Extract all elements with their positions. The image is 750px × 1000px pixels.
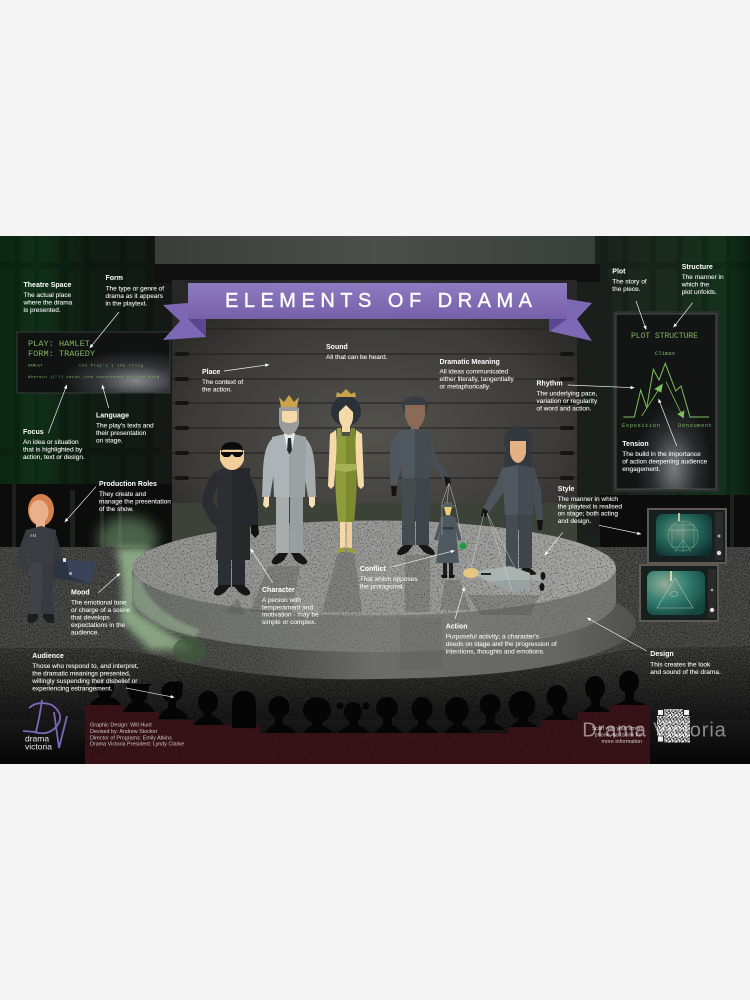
label: Production Roles [99, 481, 171, 513]
label: Character: motivation - may be [262, 612, 319, 619]
left screen: Hamlet: PLAY: HAMLET [28, 339, 90, 349]
green shadow under stage [173, 637, 207, 663]
label: Dramatic Meaning: or metaphorically. [440, 384, 491, 391]
label: Focus: An idea or situation [23, 439, 79, 446]
lower stage step [210, 602, 636, 680]
label: Action: intentions, thoughts and emotions. [446, 648, 545, 655]
right screen: plot structure [613, 311, 719, 492]
title: ELEMENTS OF DRAMA [225, 290, 533, 312]
label: Conflict: That which opposes [360, 576, 418, 583]
label: Character: temperament and [262, 604, 313, 611]
label: Focus [23, 429, 85, 461]
falling action arrow [666, 382, 684, 418]
character: queen [328, 389, 364, 553]
arrow: focus [48, 385, 67, 433]
back wall left [0, 236, 172, 484]
stage manager figure: SM [30, 533, 37, 538]
label: Design: and sound of the drama. [650, 669, 721, 676]
label: Rhythm: of word and action. [536, 406, 592, 412]
watermark: Drama Victoria [582, 720, 727, 742]
label: Style: and design. [558, 518, 592, 525]
label: Action: Action [446, 624, 467, 631]
arrow: style to stage [545, 532, 563, 555]
stage top [132, 520, 616, 616]
stage manager figure [18, 494, 62, 623]
label: Style: The manner in which [558, 496, 618, 503]
credits: Director of Programs: Emily Atkins [90, 735, 172, 741]
character: puppeteer woman [481, 426, 543, 576]
label: Mood: audience. [71, 629, 99, 636]
label: Language: on stage. [96, 437, 123, 444]
arrow: tension [659, 399, 677, 446]
centre slatted wall [172, 280, 577, 543]
label: Form: Form [106, 275, 123, 282]
label: Character: A person with [262, 597, 301, 604]
left screen: Hamlet: FORM: TRAGEDY [28, 349, 95, 359]
label: Theatre Space: is presented. [24, 307, 61, 314]
label: Structure: The manner in [682, 274, 724, 281]
label: Tension: The build in the importance [622, 451, 701, 458]
stage side [132, 570, 616, 652]
arrow: place [224, 365, 269, 371]
arrow: plot [636, 301, 646, 329]
credits: Drama Victoria President: Lyndy Clarke [90, 742, 184, 748]
label: Style: Style [558, 486, 575, 493]
label: Theatre Space: The actual place [24, 292, 72, 299]
label: Character: Character [262, 587, 295, 594]
puppet standing [434, 502, 466, 578]
arrow: conflict [390, 551, 454, 567]
arrow: audience [126, 688, 174, 697]
label: Structure: Structure [682, 264, 713, 271]
label: Production Roles: They create and [99, 491, 146, 498]
scan note [592, 726, 642, 745]
label: Tension: engagement. [622, 466, 660, 473]
right screen: plot structure: Denoument [678, 422, 712, 429]
credits: Graphic Design: Will Hunt [90, 723, 152, 729]
label: Plot: The story of [612, 278, 647, 285]
label: Structure: plot unfolds. [682, 289, 717, 296]
label: Language: The play's texts and [96, 422, 154, 430]
arrow: mood [98, 573, 120, 593]
logo: Drama Victoria [23, 700, 67, 752]
label: Style: on stage; both acting [558, 511, 618, 518]
scan note: phone, go to link for [595, 732, 642, 738]
label: Theatre Space: where the drama [22, 299, 73, 306]
arrow: character [251, 549, 273, 583]
audience silhouettes [90, 670, 645, 733]
green glow on stage side [132, 575, 200, 638]
side pillars [577, 282, 600, 283]
dark band above stage wall [155, 264, 600, 283]
label: Theatre Space [22, 282, 73, 314]
label: Sound: All that can be heard. [326, 354, 388, 361]
label: Language: Language [96, 413, 129, 420]
right screen: plot structure: Climax [655, 350, 676, 357]
television: Vitruvian man [647, 508, 727, 564]
label: Focus: that is highlighted by [23, 446, 83, 453]
character: man in black [202, 442, 259, 596]
label: Place: The context of [202, 379, 243, 386]
label: Character: simple or complex. [262, 619, 316, 626]
label: Form: drama as it appears [106, 293, 164, 300]
arrow: language [102, 385, 109, 408]
label: Focus: action, text or design. [23, 454, 85, 461]
label: Mood [71, 590, 131, 636]
arrow: structure [674, 303, 693, 327]
arrow: form [90, 312, 119, 348]
label: Production Roles: manage the presentation [99, 498, 171, 506]
label: Audience: Audience [32, 653, 64, 660]
arrow: style to television [599, 525, 641, 534]
arrow: production roles [65, 487, 96, 522]
label: Theatre Space: Theatre Space [24, 282, 71, 289]
floor [0, 547, 750, 682]
label: Sound [326, 344, 388, 361]
label: Place: Place [202, 369, 220, 376]
label: Dramatic Meaning [440, 359, 515, 391]
mood light on floor [116, 548, 195, 650]
label: Structure [681, 264, 724, 296]
poster [0, 236, 750, 764]
label: Production Roles: of the show. [99, 506, 134, 513]
label: Dramatic Meaning: Dramatic Meaning [440, 359, 500, 366]
puppet lying down [463, 566, 546, 592]
rising action arrow [642, 384, 662, 416]
label: Conflict [360, 566, 418, 590]
label: Mood: Mood [71, 590, 90, 597]
television: eye triangle [639, 564, 719, 622]
character: king [262, 395, 316, 564]
label: Production Roles: Production Roles [99, 481, 157, 488]
arrow: rhythm [568, 385, 634, 388]
label: Audience: the dramatic meanings presented, [32, 670, 131, 678]
label: Action: deeds on stage and the progression of [446, 641, 557, 648]
scan note: Scan with your smart [592, 726, 642, 732]
credits: Devised by: Andrew Stocker [90, 729, 158, 735]
QR code [657, 709, 690, 742]
label: Mood: expectations in the [71, 622, 126, 629]
label: Focus: Focus [23, 429, 44, 436]
label: Action [446, 624, 557, 655]
label: Action: Purposeful activity; a character's [446, 634, 540, 641]
figure shadows on stage [225, 552, 540, 615]
label: Form: in the playtext. [106, 300, 148, 307]
label: Plot [612, 268, 647, 293]
label: Audience: willingly suspending their disbelief or [31, 678, 138, 685]
black curtains [0, 484, 750, 550]
label: Dramatic Meaning: All ideas communicated [440, 369, 509, 376]
header beam [155, 236, 595, 264]
audience floor [0, 646, 750, 764]
label: Sound: Sound [326, 344, 348, 351]
logo: Drama Victoria: drama [25, 734, 49, 744]
label: Place: the action. [202, 386, 232, 394]
label: Mood: that develops [71, 614, 110, 622]
right screen: plot structure: Exposition [622, 422, 660, 429]
label: Style [558, 486, 622, 525]
label: Conflict: the protagonist. [360, 584, 405, 590]
banner ribbon [188, 283, 567, 319]
label: Tension: Tension [622, 441, 649, 448]
banner right tail [549, 299, 592, 341]
label: Language: their presentation [96, 430, 147, 437]
label: Plot: the piece. [612, 286, 641, 293]
label: Character [262, 587, 319, 626]
character: puppeteer man [390, 396, 451, 555]
crown [279, 395, 299, 407]
label: Conflict: Conflict [360, 566, 386, 573]
left screen: Hamlet [17, 332, 170, 393]
faint shadows on stage side [400, 618, 442, 670]
label: Place [202, 369, 243, 394]
label: Design: This creates the look [650, 662, 711, 669]
label: Audience: experiencing estrangement. [32, 685, 113, 692]
credits [90, 723, 184, 748]
label: Tension: of action deepening audience [622, 458, 708, 466]
arrow: design [587, 618, 647, 651]
plot line [623, 363, 709, 417]
green glow on wall [98, 516, 158, 564]
scan note: more information [602, 739, 642, 745]
label: Form [106, 275, 164, 307]
label: Mood: The emotional tone [71, 600, 127, 607]
label: Audience [31, 653, 139, 692]
queen crown [336, 389, 356, 397]
label: Style: the playtext is realised [558, 503, 622, 510]
right screen: plot structure: PLOT STRUCTURE [631, 332, 698, 341]
label: Language [96, 413, 154, 444]
label: Rhythm: Rhythm [536, 381, 563, 388]
label: Design: Design [650, 651, 674, 658]
label: Rhythm: The underlying pace, [536, 391, 597, 398]
label: Structure: which the [681, 282, 710, 288]
back wall right [575, 236, 750, 556]
label: Plot: Plot [612, 268, 626, 276]
label: Dramatic Meaning: either literally, tangentially [440, 376, 515, 383]
label: Audience: Those who respond to, and interpret, [32, 663, 139, 670]
arrow: action [455, 587, 464, 619]
label: Design [650, 651, 721, 676]
label: Mood: or charge of a scene [71, 607, 131, 614]
puppet strings [442, 483, 515, 590]
banner [163, 283, 592, 341]
stage light [53, 558, 95, 584]
logo: Drama Victoria: victoria [25, 742, 52, 752]
label: Rhythm [536, 381, 598, 412]
left screen: Hamlet: the Play's | the thing [79, 364, 144, 368]
label: Rhythm: variation or regularity [536, 398, 598, 405]
left screen: Hamlet: Wherein |I'll catch |the conscience of |the King [28, 375, 160, 380]
label: Tension [622, 441, 708, 473]
label: Form: The type or genre of [106, 286, 164, 292]
left screen: Hamlet: HAMLET [28, 364, 43, 368]
audience seats [85, 705, 650, 764]
banner left tail [163, 303, 206, 340]
green lantern [460, 542, 466, 550]
